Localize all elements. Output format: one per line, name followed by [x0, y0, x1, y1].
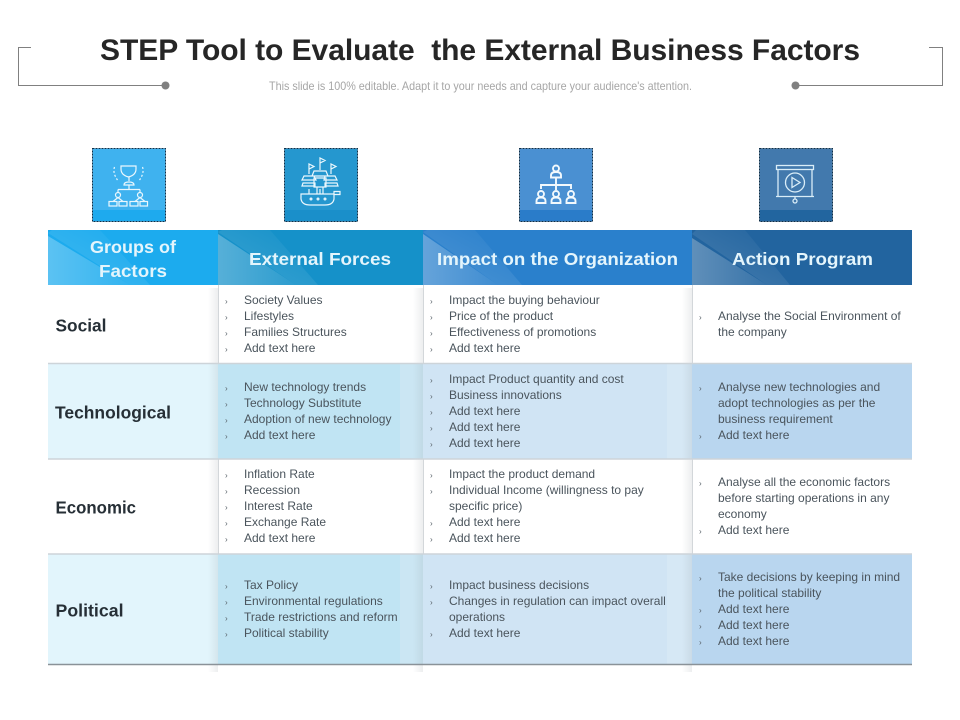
impact: economic — [430, 467, 644, 545]
forces: political — [225, 578, 398, 640]
action: political: Take decisions by keeping in mind — [718, 570, 900, 584]
forces: technological: › — [225, 416, 228, 425]
forces: economic: Inflation Rate — [244, 467, 315, 481]
header: action program — [692, 230, 912, 285]
row: technological — [55, 372, 880, 450]
forces: social: Lifestyles — [244, 309, 294, 323]
header: groups of factors: Groups of — [90, 237, 176, 257]
header: action program: Action Program — [732, 249, 873, 269]
header: impact on the organization: Impact on the Organization — [437, 249, 678, 269]
forces: political: › — [225, 582, 228, 591]
forces: technological — [225, 380, 391, 442]
action: political: Add text here — [718, 602, 790, 616]
impact: technological: Add text here — [449, 404, 521, 418]
impact: technological: Add text here — [449, 436, 521, 450]
header: groups of factors: Factors — [99, 261, 167, 281]
forces: political: Tax Policy — [244, 578, 298, 592]
impact: technological: › — [430, 392, 433, 401]
header: external forces — [218, 230, 424, 285]
action: economic — [699, 475, 890, 537]
forces: political: Environmental regulations — [244, 594, 383, 608]
impact: social: Impact the buying behaviour — [449, 293, 600, 307]
action: technological: adopt technologies as per the — [718, 396, 876, 410]
impact: economic: › — [430, 519, 433, 528]
forces: social: › — [225, 329, 228, 338]
forces: political: Political stability — [244, 626, 329, 640]
action: social — [699, 309, 901, 339]
subtitle: This slide is 100% editable. Adapt it to your needs and capture your audience's attention. — [269, 79, 692, 93]
forces: economic: › — [225, 471, 228, 480]
forces: economic: › — [225, 487, 228, 496]
impact: economic: Impact the product demand — [449, 467, 595, 481]
impact: political: › — [430, 598, 433, 607]
forces: technological: › — [225, 400, 228, 409]
left bracket — [18, 48, 170, 90]
impact: political: operations — [449, 610, 505, 624]
action: technological: › — [699, 384, 702, 393]
table header — [48, 230, 912, 285]
impact: social: › — [430, 345, 433, 354]
forces: technological: › — [225, 384, 228, 393]
icon: presentation screen — [760, 148, 832, 222]
forces: economic: Interest Rate — [244, 499, 313, 513]
label: economic: Economic — [56, 498, 136, 518]
action: technological: Add text here — [718, 428, 790, 442]
action: economic: before starting operations in any — [718, 491, 889, 505]
action: political: Add text here — [718, 618, 790, 632]
forces: social — [225, 293, 347, 355]
action: political: the political stability — [718, 586, 821, 600]
forces: economic: Recession — [244, 483, 300, 497]
row: social — [56, 293, 901, 355]
action: technological: › — [699, 432, 702, 441]
impact: economic: › — [430, 487, 433, 496]
impact: technological: Business innovations — [449, 388, 562, 402]
action: social: Analyse the Social Environment of — [718, 309, 901, 323]
header: impact on the organization — [423, 230, 692, 285]
impact: technological: › — [430, 424, 433, 433]
forces: social: › — [225, 345, 228, 354]
forces: technological: Adoption of new technology — [244, 412, 391, 426]
impact: economic: specific price) — [449, 499, 522, 513]
action: economic: › — [699, 527, 702, 536]
action: political: › — [699, 638, 702, 647]
label: social: Social — [56, 316, 106, 336]
action: economic: › — [699, 479, 702, 488]
impact: technological — [430, 372, 624, 450]
forces: social: › — [225, 297, 228, 306]
forces: social: › — [225, 313, 228, 322]
impact: social: › — [430, 297, 433, 306]
impact: political: › — [430, 630, 433, 639]
forces: technological: Technology Substitute — [244, 396, 362, 410]
row: economic — [56, 467, 890, 545]
forces: social: Society Values — [244, 293, 322, 307]
action: economic: Add text here — [718, 523, 790, 537]
action: technological: business requirement — [718, 412, 833, 426]
forces: political: Trade restrictions and reform — [244, 610, 398, 624]
impact: economic: › — [430, 471, 433, 480]
impact: political: Add text here — [449, 626, 521, 640]
label: technological: Technological — [55, 402, 171, 422]
right bracket — [792, 48, 942, 90]
impact: economic: Individual Income (willingness to pay — [449, 483, 644, 497]
row backgrounds — [48, 285, 912, 672]
impact: political — [430, 578, 666, 640]
impact: technological: › — [430, 440, 433, 449]
forces: economic: › — [225, 503, 228, 512]
impact: social: Price of the product — [449, 309, 554, 323]
impact: technological: Impact Product quantity and cost — [449, 372, 624, 386]
impact: technological: › — [430, 376, 433, 385]
action: political — [699, 570, 900, 648]
forces: economic: Exchange Rate — [244, 515, 326, 529]
impact: political: Changes in regulation can impact overall — [449, 594, 666, 608]
impact: technological: › — [430, 408, 433, 417]
forces: economic — [225, 467, 326, 545]
impact: social: Effectiveness of promotions — [449, 325, 596, 339]
header: external forces: External Forces — [249, 249, 391, 269]
impact: economic: › — [430, 535, 433, 544]
title: STEP Tool to Evaluate the External Business Factors — [100, 34, 860, 67]
forces: technological: Add text here — [244, 428, 316, 442]
impact: economic: Add text here — [449, 515, 521, 529]
forces: political: › — [225, 630, 228, 639]
action: technological — [699, 380, 880, 442]
forces: economic: › — [225, 535, 228, 544]
impact: political: › — [430, 582, 433, 591]
forces: political: › — [225, 614, 228, 623]
action: social: › — [699, 313, 702, 322]
action: economic: Analyse all the economic factors — [718, 475, 890, 489]
impact: economic: Add text here — [449, 531, 521, 545]
action: economic: economy — [718, 507, 767, 521]
icon: ship — [284, 148, 358, 222]
row: political — [56, 570, 900, 648]
impact: technological: Add text here — [449, 420, 521, 434]
impact: social: Add text here — [449, 341, 521, 355]
icon: trophy bracket — [92, 148, 166, 222]
forces: political: › — [225, 598, 228, 607]
action: political: › — [699, 622, 702, 631]
action: social: the company — [718, 325, 787, 339]
forces: economic: › — [225, 519, 228, 528]
header: groups of factors — [48, 230, 218, 285]
forces: economic: Add text here — [244, 531, 316, 545]
impact: social: › — [430, 329, 433, 338]
action: political: Add text here — [718, 634, 790, 648]
action: technological: Analyse new technologies and — [718, 380, 880, 394]
forces: social: Add text here — [244, 341, 316, 355]
forces: technological: › — [225, 432, 228, 441]
icon: hierarchy — [520, 148, 592, 222]
action: political: › — [699, 606, 702, 615]
forces: social: Families Structures — [244, 325, 347, 339]
impact: social — [430, 293, 600, 355]
action: political: › — [699, 574, 702, 583]
impact: political: Impact business decisions — [449, 578, 589, 592]
label: political: Political — [56, 600, 124, 620]
forces: technological: New technology trends — [244, 380, 366, 394]
impact: social: › — [430, 313, 433, 322]
